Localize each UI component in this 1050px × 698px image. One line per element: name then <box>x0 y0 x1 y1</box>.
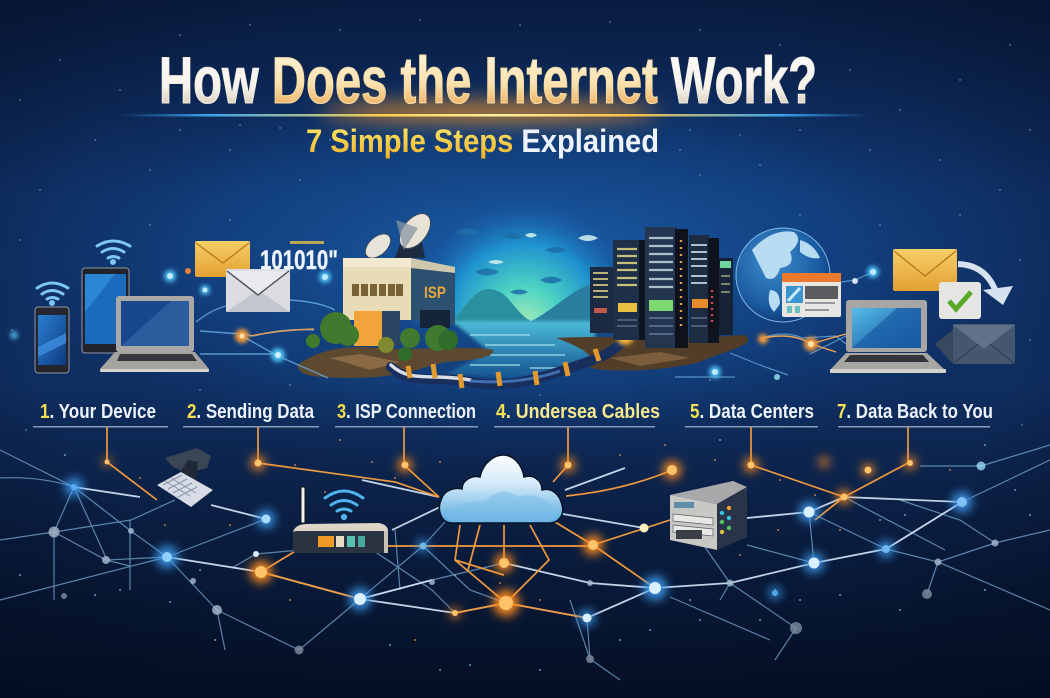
bright main links <box>74 468 962 618</box>
step 5 data center racks <box>590 227 733 348</box>
data nodes <box>10 268 331 362</box>
link lines to ISP <box>196 300 335 378</box>
icon: laptop <box>100 296 209 372</box>
icon: yellow envelope <box>893 249 957 291</box>
icon: keyboard device <box>157 448 213 507</box>
rack 4 <box>689 235 719 343</box>
icon: check card <box>939 282 981 319</box>
orange nodes glow <box>103 456 916 618</box>
icon: dark envelope <box>935 324 1015 364</box>
central scene: sky, sea and land <box>297 214 748 379</box>
horizon line <box>120 114 870 116</box>
link nodes <box>675 266 879 380</box>
blue node cores <box>71 484 967 622</box>
icon: return arrow <box>958 264 1013 305</box>
label: step 1: 1. Your Device <box>40 401 156 423</box>
icon: router <box>293 487 388 553</box>
title <box>120 43 870 159</box>
icon: browser window <box>782 273 841 317</box>
icon: server box <box>670 481 747 550</box>
orange node cores <box>104 460 913 616</box>
icon: cloud <box>439 455 563 523</box>
icon: globe <box>736 228 830 322</box>
icon: wifi over phone <box>37 283 68 304</box>
step 7 data back to you <box>675 228 1015 380</box>
rack 2 <box>613 240 645 340</box>
undersea cable <box>391 327 634 388</box>
rack 3 <box>645 227 688 348</box>
rack 5 <box>719 258 733 335</box>
blue nodes glow <box>65 478 972 626</box>
network diagram <box>0 427 1050 680</box>
fish clouds <box>455 228 567 294</box>
label: step 5: 5. Data Centers <box>690 401 814 423</box>
windows <box>352 284 403 296</box>
left shore <box>297 347 493 378</box>
ambient dots <box>140 440 950 640</box>
step labels <box>33 401 993 428</box>
step 2 sending data <box>10 241 338 378</box>
label: step 3: 3. ISP Connection <box>337 401 476 423</box>
router wifi <box>325 491 363 519</box>
binary dashes <box>290 241 324 244</box>
icon: laptop <box>830 300 946 373</box>
heading: How Does the Internet Work? <box>159 43 817 117</box>
icon: yellow envelope <box>195 241 250 277</box>
label: step 2: 2. Sending Data <box>187 401 315 423</box>
icon: wifi over tablet <box>97 241 130 264</box>
cable glow <box>616 327 634 345</box>
door <box>354 311 382 346</box>
icon: satellite dishes <box>361 208 437 263</box>
icon: tablet <box>82 268 129 353</box>
ISP sign: ISP <box>424 283 446 302</box>
glow behind horizon line <box>320 102 660 122</box>
building side <box>411 258 455 325</box>
orange links <box>107 427 908 618</box>
step 3 ISP building <box>306 208 458 361</box>
blue and white links <box>0 445 1050 680</box>
bushes <box>306 312 458 361</box>
grey nodes <box>48 462 998 663</box>
icon: white envelope <box>226 269 290 312</box>
label: step 7: 7. Data Back to You <box>837 401 993 423</box>
right shore <box>556 335 748 370</box>
rack 1 <box>590 267 613 333</box>
step 1 devices <box>35 241 209 373</box>
building front <box>343 258 411 320</box>
binary text: 101010" <box>260 245 338 275</box>
label: step 4: 4. Undersea Cables <box>496 401 660 423</box>
subtitle: 7 Simple Steps Explained <box>306 123 659 159</box>
icon: smartphone <box>35 307 69 373</box>
